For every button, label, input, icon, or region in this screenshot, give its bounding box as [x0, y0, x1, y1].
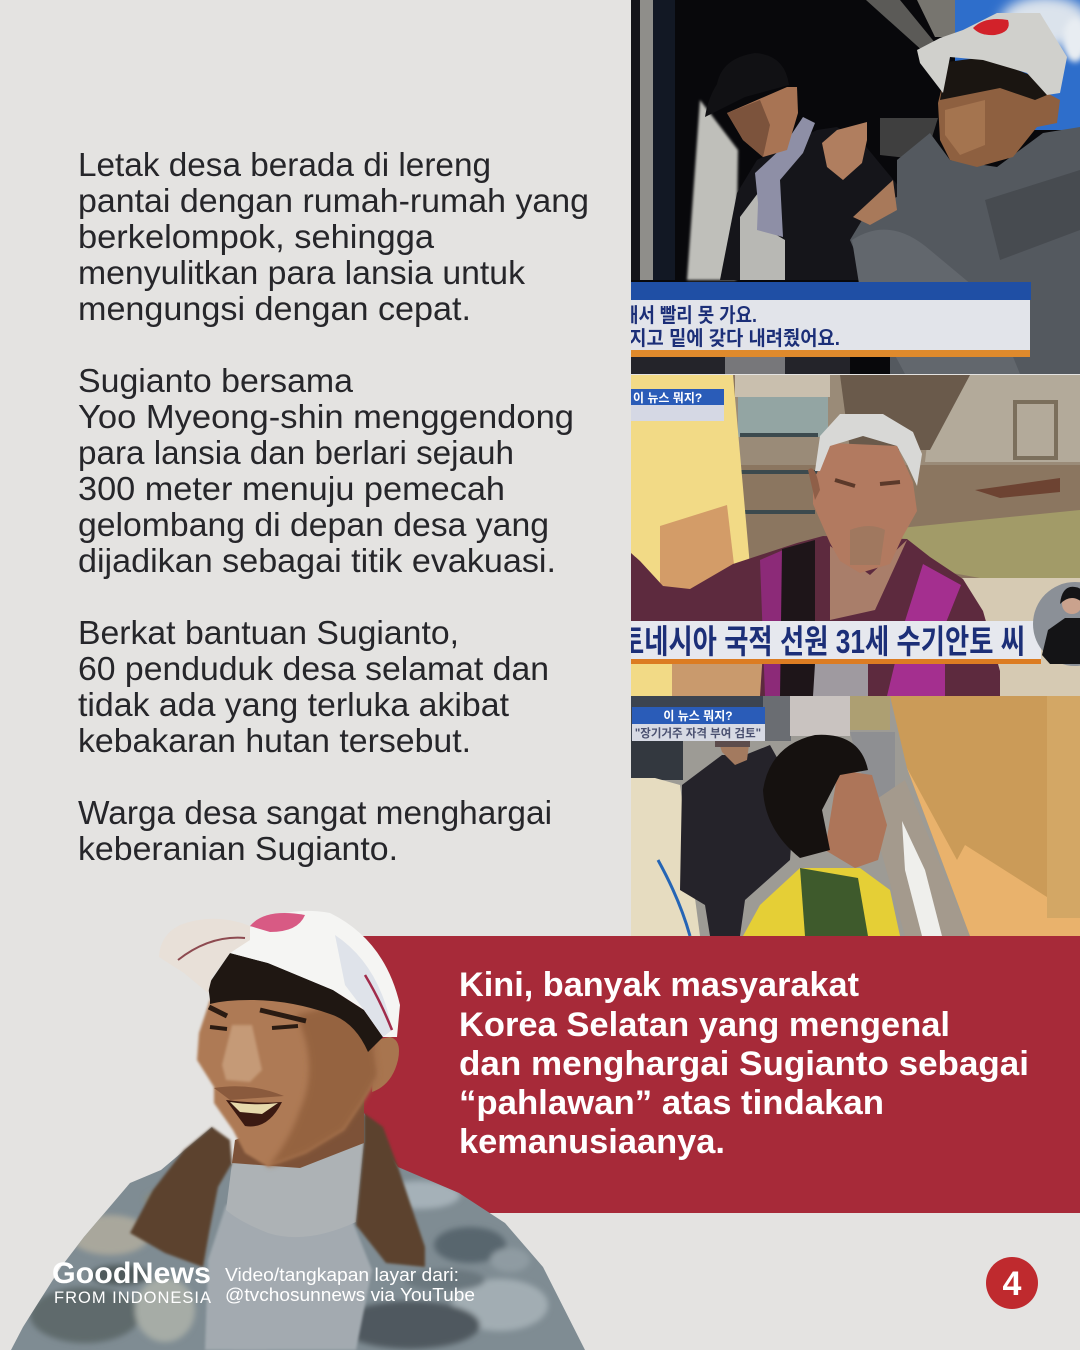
eyes and brows — [209, 1007, 306, 1029]
photo: two men in doorway with caption banner — [612, 0, 1080, 374]
body text — [78, 146, 589, 867]
sign language interpreter — [1033, 582, 1080, 666]
news tag: "장기거주 자격 부여 검토" — [635, 726, 761, 740]
page number badge: 4 — [1003, 1265, 1022, 1303]
ear — [372, 1037, 399, 1092]
body text: tidak ada yang terluka akibat — [78, 686, 509, 723]
caption banner: 해서 빨리 못 가요. — [622, 304, 757, 327]
body text: Yoo Myeong-shin menggendong — [78, 398, 574, 435]
face — [197, 990, 380, 1167]
body text: 60 penduduk desa selamat dan — [78, 650, 549, 687]
mouth — [226, 1100, 282, 1126]
man in dark jacket — [680, 737, 795, 936]
turtleneck — [226, 1143, 364, 1237]
caption banner — [612, 282, 1031, 357]
cap script — [365, 975, 392, 1030]
news tag — [631, 389, 724, 421]
body text: Sugianto bersama — [78, 362, 354, 399]
body text: 300 meter menuju pemecah — [78, 470, 505, 507]
body text: berkelompok, sehingga — [78, 218, 435, 255]
source credit: @tvchosunnews via YouTube — [225, 1285, 475, 1305]
cap flower — [250, 913, 305, 932]
body text: menyulitkan para lansia untuk — [78, 254, 526, 291]
body text: keberanian Sugianto. — [78, 830, 398, 867]
red callout panel: Korea Selatan yang mengenal — [459, 1006, 950, 1044]
photo: elderly man with caption banner — [620, 375, 1080, 696]
news tag: 이 뉴스 뭐지? — [633, 391, 702, 405]
brown collar left — [130, 1127, 232, 1267]
elderly man — [631, 414, 1000, 696]
jacket — [0, 1110, 600, 1350]
red callout panel: “pahlawan” atas tindakan — [459, 1084, 884, 1122]
man in black cap — [705, 53, 913, 280]
hair — [208, 953, 383, 1052]
body text: pantai dengan rumah-rumah yang — [78, 182, 589, 219]
caption banner: 가지고 밑에 갖다 내려줬어요. — [612, 327, 840, 350]
footer logo: GoodNews — [52, 1257, 211, 1290]
footer logo — [52, 1257, 211, 1307]
page number badge — [986, 1257, 1038, 1309]
footer logo: FROM INDONESIA — [54, 1289, 211, 1307]
cap crown — [230, 911, 400, 1037]
red callout panel: Kini, banyak masyarakat — [459, 966, 859, 1004]
body text: para lansia dan berlari sejauh — [78, 434, 514, 471]
news tag — [632, 707, 765, 741]
source credit — [225, 1265, 475, 1305]
nose — [222, 1025, 262, 1082]
red callout panel: dan menghargai Sugianto sebagai — [459, 1045, 1029, 1083]
body text: dijadikan sebagai titik evakuasi. — [78, 542, 556, 579]
sweater — [205, 1205, 372, 1350]
body text: Letak desa berada di lereng — [78, 146, 491, 183]
elderly woman — [743, 735, 900, 936]
body text: Berkat bantuan Sugianto, — [78, 614, 459, 651]
photo: elderly woman and man — [631, 696, 1080, 936]
cap brim — [159, 919, 250, 993]
neck — [232, 1090, 364, 1168]
man in white cap — [850, 13, 1080, 374]
source credit: Video/tangkapan layar dari: — [225, 1265, 459, 1285]
red callout panel: kemanusiaanya. — [459, 1123, 725, 1161]
brown collar right — [356, 1113, 425, 1267]
body text: Warga desa sangat menghargai — [78, 794, 552, 831]
body text: kebakaran hutan tersebut. — [78, 722, 471, 759]
news tag: 이 뉴스 뭐지? — [663, 709, 733, 723]
body text: mengungsi dengan cepat. — [78, 290, 471, 327]
photo: Sugianto portrait — [0, 911, 600, 1350]
red callout panel — [340, 936, 1080, 1213]
body text: gelombang di depan desa yang — [78, 506, 549, 543]
